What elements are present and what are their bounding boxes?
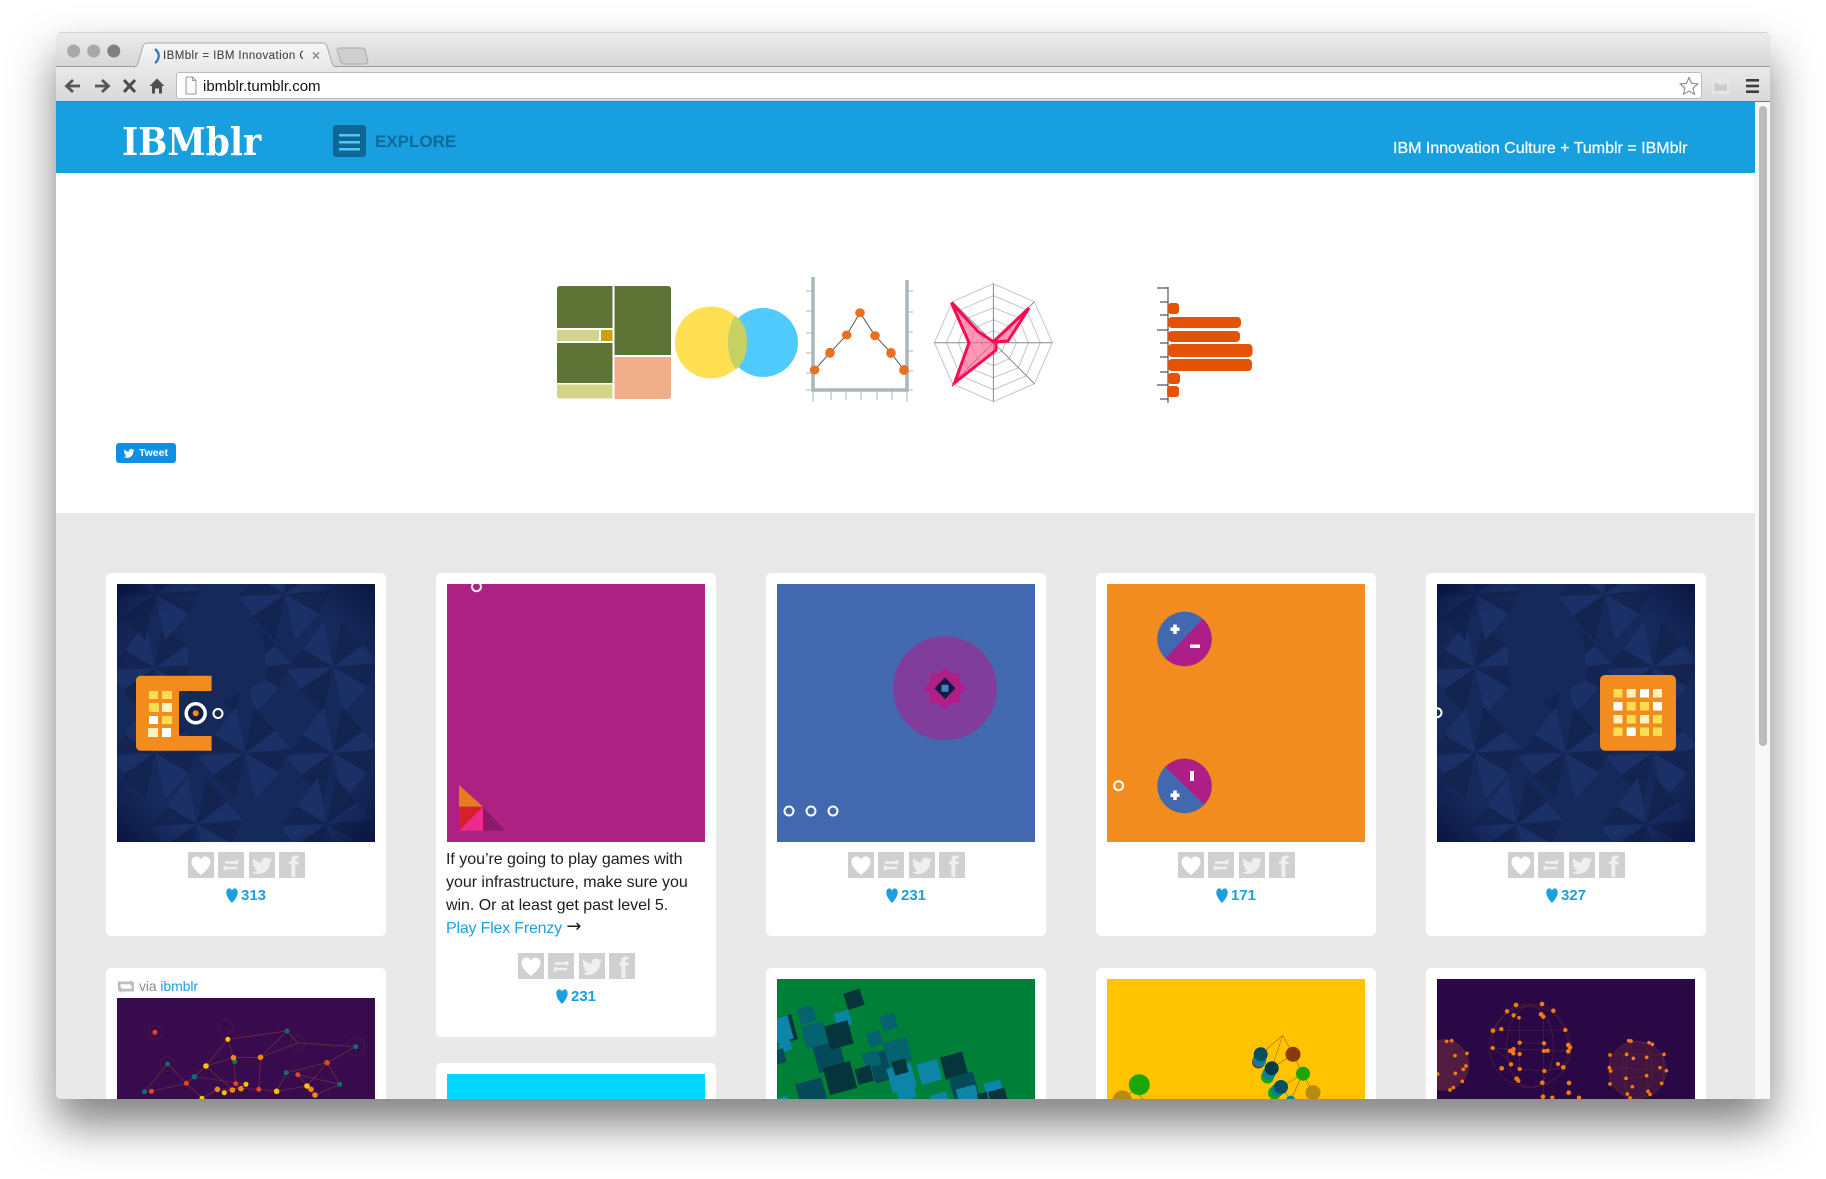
like count: 231 bbox=[901, 887, 926, 904]
navigation icons bbox=[64, 78, 164, 94]
post text: Play Flex Frenzy → bbox=[446, 916, 581, 937]
like count bbox=[886, 887, 926, 904]
venn diagram bbox=[675, 306, 798, 378]
network image bbox=[117, 998, 375, 1099]
hero chart illustrations bbox=[557, 277, 1252, 403]
extension icon bbox=[1712, 83, 1729, 94]
star icon bbox=[1679, 76, 1699, 96]
card: dark blue logo grid bbox=[106, 573, 386, 936]
browser tab bbox=[133, 42, 368, 68]
like count bbox=[226, 887, 266, 904]
hero panel bbox=[56, 173, 1755, 513]
card: dark blue orange square bbox=[1426, 573, 1706, 936]
tab strip bbox=[56, 32, 1770, 67]
toolbar bbox=[56, 67, 1770, 102]
cyan image bbox=[447, 1074, 705, 1099]
horizontal bar chart bbox=[1157, 287, 1252, 403]
treemap bbox=[557, 286, 671, 399]
like count bbox=[1546, 887, 1586, 904]
via label: via ibmblr bbox=[139, 978, 198, 994]
site header bar bbox=[56, 102, 1755, 173]
squares image bbox=[777, 979, 1035, 1099]
scroll thumb bbox=[1759, 106, 1767, 746]
spheres image bbox=[1437, 979, 1695, 1099]
share icons bbox=[1508, 852, 1625, 878]
like count: 231 bbox=[571, 988, 596, 1005]
card: orange plus minus bbox=[1096, 573, 1376, 936]
card: blue circle bbox=[766, 573, 1046, 936]
animated image bbox=[117, 584, 375, 842]
tagline: IBM Innovation Culture + Tumblr = IBMblr bbox=[1393, 140, 1687, 157]
card: yellow nodes bbox=[1096, 968, 1376, 1099]
share icons bbox=[848, 852, 965, 878]
window controls bbox=[67, 44, 120, 58]
post text: If you’re going to play games with bbox=[446, 851, 682, 868]
card: reblog network bbox=[106, 968, 386, 1099]
animated image bbox=[1437, 584, 1695, 842]
tweet label: Tweet bbox=[139, 447, 168, 459]
url text: ibmblr.tumblr.com bbox=[203, 78, 321, 95]
explore label: EXPLORE bbox=[375, 132, 456, 151]
animated image bbox=[447, 584, 705, 842]
card: purple spheres bbox=[1426, 968, 1706, 1099]
share icons bbox=[1178, 852, 1295, 878]
explore button bbox=[333, 125, 366, 157]
animated image bbox=[777, 584, 1035, 842]
nodes image bbox=[1107, 979, 1365, 1099]
post text bbox=[446, 851, 688, 937]
address bar bbox=[176, 72, 1702, 99]
card: magenta game post bbox=[436, 573, 716, 1037]
card: green squares bbox=[766, 968, 1046, 1099]
page icon bbox=[186, 76, 196, 94]
like count: 327 bbox=[1561, 887, 1586, 904]
line chart bbox=[806, 277, 913, 402]
logo: IBMblr bbox=[122, 119, 261, 164]
share icons bbox=[188, 852, 305, 878]
twitter bird bbox=[124, 448, 134, 458]
card: cyan post bbox=[436, 1063, 716, 1099]
like count bbox=[556, 988, 596, 1005]
like count: 313 bbox=[241, 887, 266, 904]
radar chart bbox=[934, 284, 1052, 402]
post text: your infrastructure, make sure you bbox=[446, 874, 688, 891]
scrollbar bbox=[1755, 102, 1770, 1099]
like count bbox=[1216, 887, 1256, 904]
reblog icon bbox=[118, 980, 134, 993]
tweet button bbox=[116, 443, 176, 463]
share icons bbox=[518, 953, 635, 979]
post text: win. Or at least get past level 5. bbox=[446, 897, 668, 914]
animated image bbox=[1107, 584, 1365, 842]
like count: 171 bbox=[1231, 887, 1256, 904]
menu icon bbox=[1746, 79, 1759, 93]
